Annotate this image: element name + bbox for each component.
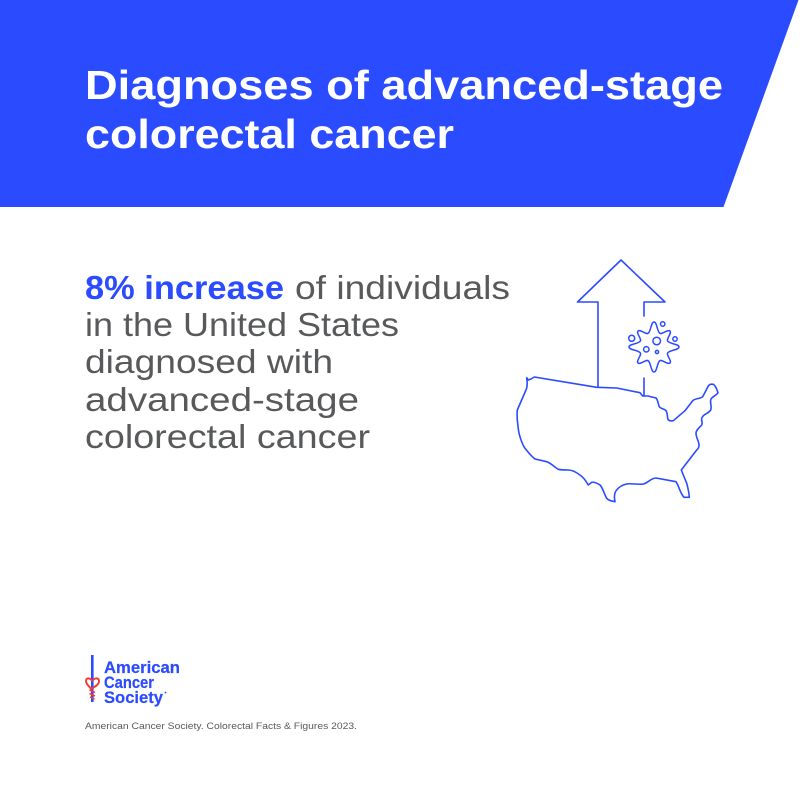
icon: sword: [86, 655, 99, 702]
statistic text block: in the United States: [85, 306, 399, 343]
logo wordmark: American: [104, 658, 180, 677]
illustration: US map with up arrow and virus: [517, 260, 718, 502]
icon: US map: [517, 377, 718, 502]
statistic text block: diagnosed with: [85, 343, 333, 380]
icon: up arrow: [578, 260, 665, 396]
header banner: [0, 0, 798, 207]
statistic text block: [85, 269, 510, 455]
logo: American Cancer Society: [86, 655, 180, 707]
statistic text block: 8% increase: [85, 269, 284, 306]
source citation: American Cancer Society. Colorectal Facts & Figures 2023.: [85, 721, 357, 732]
title: Diagnoses of advanced-stage: [85, 62, 723, 108]
statistic text block: of individuals: [295, 269, 510, 306]
title: colorectal cancer: [85, 111, 454, 157]
title: [85, 62, 723, 157]
statistic text block: colorectal cancer: [85, 418, 370, 455]
logo wordmark: Cancer: [104, 673, 154, 692]
icon: virus: [629, 322, 679, 372]
logo wordmark: [104, 658, 180, 707]
statistic text block: advanced-stage: [85, 381, 359, 418]
logo wordmark: Society: [104, 688, 164, 707]
